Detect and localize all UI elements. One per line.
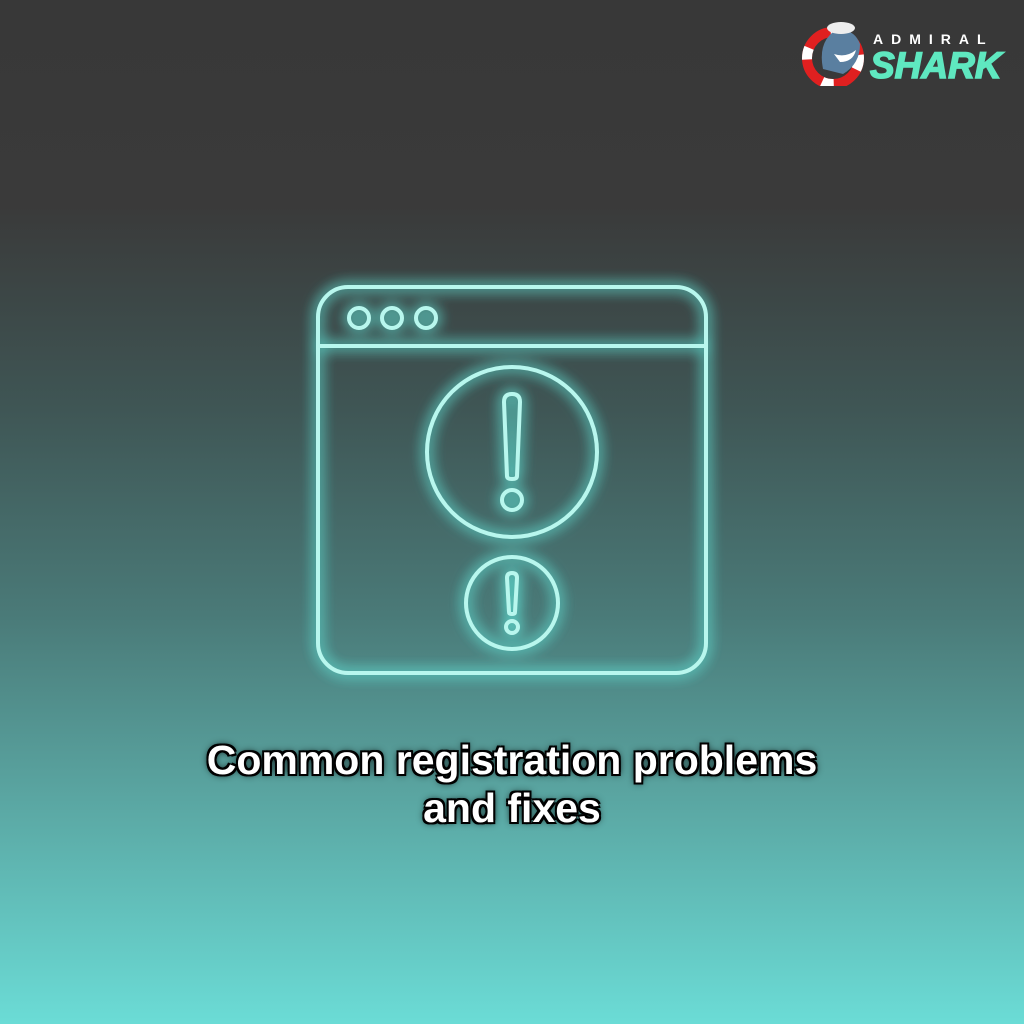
title (202, 737, 821, 831)
logo: Admiral Shark (802, 22, 1006, 86)
title: Common registration problems (207, 737, 817, 783)
title: and fixes (423, 785, 601, 831)
logo: Admiral Shark: ADMIRAL (873, 31, 994, 47)
logo: Admiral Shark: SHARK (870, 45, 1004, 86)
